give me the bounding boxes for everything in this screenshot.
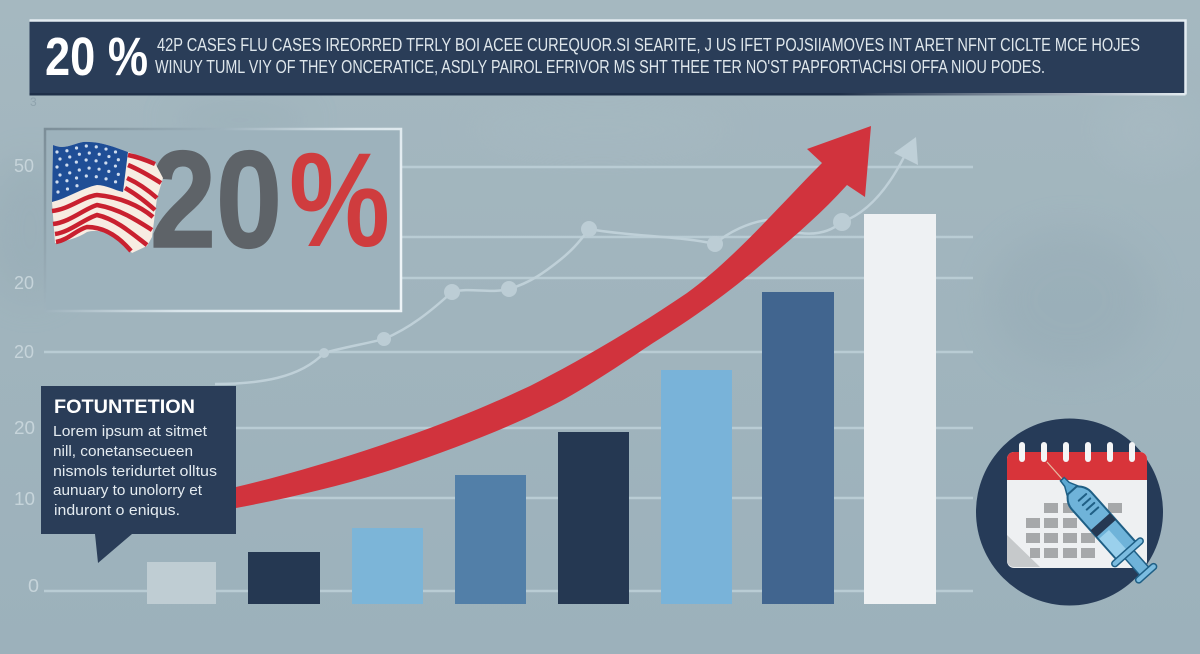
icon: american flag — [52, 142, 163, 253]
callout body text: induront o eniqus. — [54, 503, 180, 519]
big percent sign: % — [289, 126, 390, 275]
big stat number: 20 — [150, 123, 282, 277]
y axis labels: 20 — [14, 342, 34, 362]
callout body text — [53, 424, 217, 519]
y axis labels: 20 — [14, 418, 35, 438]
y axis labels: 50 — [14, 156, 34, 176]
y axis labels: 20 — [14, 273, 34, 293]
red trend arrow — [236, 126, 871, 508]
header banner — [30, 20, 1186, 96]
stat box — [45, 123, 401, 311]
y axis labels: 3 — [30, 95, 37, 109]
y axis labels — [14, 95, 39, 596]
line arrow head — [894, 137, 918, 165]
banner stat: 20 % — [45, 27, 148, 87]
syringe — [1032, 449, 1163, 589]
callout body text: nismols teridurtet olltus — [53, 464, 217, 480]
y axis labels: 10 — [14, 489, 35, 509]
icon: calendar and syringe — [976, 418, 1163, 606]
callout — [41, 386, 236, 563]
callout body text: nill, conetansecueen — [53, 444, 193, 460]
callout heading: FOTUNTETION — [54, 397, 195, 418]
callout body text: aunuary to unolorry et — [53, 483, 202, 499]
chart grid lines — [44, 167, 973, 591]
y axis labels: 0 — [28, 576, 39, 596]
line trend with arrow — [215, 137, 918, 384]
bar chart — [147, 214, 936, 604]
line data points — [319, 213, 851, 358]
banner text — [155, 34, 1140, 77]
calendar — [1007, 442, 1147, 568]
callout body text: Lorem ipsum at sitmet — [53, 424, 207, 440]
